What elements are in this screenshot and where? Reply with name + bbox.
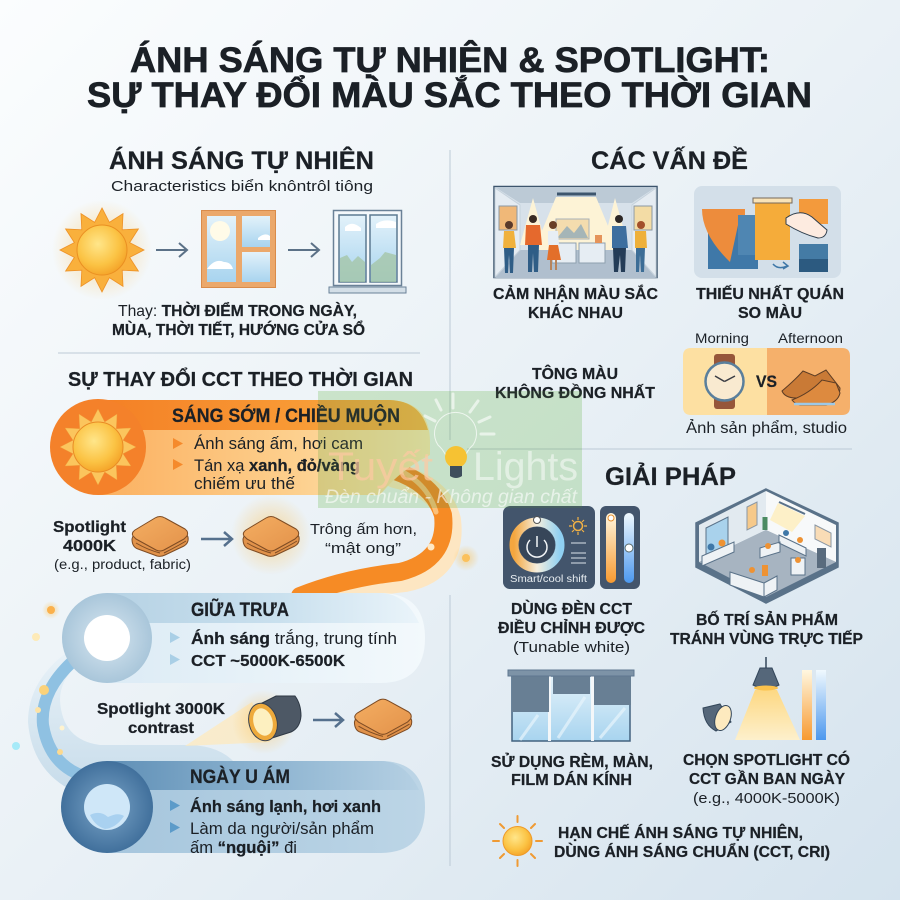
label: spotlight 3000K — [97, 701, 225, 737]
caption: tunable CCT: DÙNG ĐÈN CCT — [511, 599, 632, 618]
blue swirl connector — [12, 545, 479, 792]
text: variables: Thay: THỜI ĐIỂM TRONG NGÀY, — [118, 301, 357, 320]
band background — [98, 400, 430, 495]
watermark logo: Lights — [473, 445, 578, 489]
label: spotlight 4000K — [53, 519, 191, 572]
panel: watch vs shoes — [683, 348, 850, 415]
text: morning details: chiếm ưu thế — [194, 475, 295, 493]
icon: modern window — [329, 210, 406, 293]
title — [87, 40, 812, 115]
watermark logo: Đèn chuẩn - Không gian chất — [325, 487, 578, 508]
heading: midday: GIỮA TRƯA — [191, 599, 289, 621]
caption: product photos: Ảnh sản phẩm, studio — [686, 418, 847, 437]
panel: early morning / late afternoon — [50, 399, 430, 495]
panel: overcast — [61, 761, 425, 857]
caption: color perception — [493, 284, 658, 322]
watermark logo — [318, 391, 582, 508]
heading: CCT over time: SỰ THAY ĐỔI CCT THEO THỜI GIAN — [68, 367, 413, 391]
text: midday details: Ánh sáng trắng, trung tính — [191, 629, 397, 648]
heading: natural light: ÁNH SÁNG TỰ NHIÊN — [109, 145, 374, 175]
caption: blinds: FILM DÁN KÍNH — [511, 770, 632, 789]
text: variables: MÙA, THỜI TIẾT, HƯỚNG CỬA SỔ — [112, 320, 365, 339]
icon: fabric before — [132, 516, 188, 556]
text: warmer: “mật ong” — [325, 540, 401, 557]
icon: fabric warm — [231, 495, 311, 575]
caption: product placement: BỐ TRÍ SẢN PHẨM — [696, 609, 838, 629]
heading: problems: CÁC VẤN ĐỀ — [591, 146, 748, 175]
text: overcast details: ấm “nguội” đi — [190, 839, 297, 857]
bullets — [170, 632, 180, 665]
text: VS: VS — [756, 373, 777, 391]
panel: solutions — [491, 461, 863, 866]
heading: solutions: GIẢI PHÁP — [605, 461, 736, 491]
panel: problems — [493, 146, 850, 437]
orange ribbon arrow — [300, 466, 450, 600]
labels: morning afternoon: Morning — [695, 330, 749, 346]
spotlight 4000K row — [53, 495, 417, 575]
bullets — [173, 438, 183, 470]
caption: uneven tone — [495, 364, 655, 402]
icon: CCT sliders — [600, 506, 640, 589]
title: SỰ THAY ĐỔI MÀU SẮC THEO THỜI GIAN — [87, 75, 812, 115]
title: ÁNH SÁNG TỰ NHIÊN & SPOTLIGHT: — [130, 40, 770, 80]
icon: bulb — [425, 394, 494, 478]
band background — [107, 761, 425, 853]
caption: choose spotlight: (e.g., 4000K-5000K) — [693, 791, 840, 807]
label: spotlight 4000K: (e.g., product, fabric) — [54, 557, 191, 572]
caption: inconsistency: SO MÀU — [738, 303, 802, 322]
label: spotlight 4000K: Spotlight — [53, 519, 127, 536]
icon: sun — [52, 200, 152, 300]
caption: choose spotlight: CHỌN SPOTLIGHT CÓ — [683, 750, 850, 769]
icon: tunable control dial — [503, 506, 595, 589]
icon: watch — [706, 354, 744, 409]
text: variables — [112, 301, 365, 339]
illustration: fabric comparison — [694, 186, 841, 278]
caption: product placement: TRÁNH VÙNG TRỰC TIẾP — [670, 629, 863, 648]
bullets — [170, 800, 180, 833]
caption: tunable CCT: ĐIỀU CHỈNH ĐƯỢC — [498, 618, 645, 637]
label: spotlight 4000K: 4000K — [63, 538, 116, 555]
label: spotlight 3000K: contrast — [128, 720, 195, 737]
icon: morning sun — [50, 399, 146, 495]
callout: limit natural light: HẠN CHẾ ÁNH SÁNG TỰ NHIÊN, — [558, 823, 803, 842]
text: morning details: Ánh sáng ấm, hơi cam — [194, 434, 363, 453]
text: warmer: Trông ấm hơn, — [310, 521, 417, 538]
band background — [107, 593, 425, 683]
text: midday details: CCT ~5000K-6500K — [191, 653, 345, 670]
callout: limit natural light — [554, 823, 830, 861]
caption: blinds — [491, 752, 653, 789]
icon: small sun — [493, 816, 542, 866]
illustration: gallery visitors — [494, 186, 657, 278]
heading: morning: SÁNG SỚM / CHIỀU MUỘN — [172, 405, 400, 427]
text: morning details — [194, 434, 363, 493]
icon: white sun — [62, 593, 152, 683]
icon: overcast sun — [61, 761, 153, 853]
illustration: daylight spotlight — [703, 657, 826, 740]
labels: morning afternoon — [695, 330, 843, 346]
text: overcast details: Làm da người/sản phẩm — [190, 820, 374, 838]
caption: choose spotlight — [683, 750, 850, 807]
caption: blinds: SỬ DỤNG RÈM, MÀN, — [491, 752, 653, 771]
heading: overcast: NGÀY U ÁM — [190, 766, 290, 788]
labels: morning afternoon: Afternoon — [778, 330, 843, 346]
illustration: window blinds — [508, 670, 634, 741]
light beam — [185, 702, 270, 746]
icon: shoes — [782, 370, 840, 405]
arrow — [201, 532, 232, 546]
caption: color perception: KHÁC NHAU — [528, 303, 623, 322]
icon: tunable control dial: Smart/cool shift — [510, 574, 587, 585]
watermark text: Tuyết — [328, 445, 433, 489]
caption: product placement — [670, 609, 863, 648]
caption: color perception: CẢM NHẬN MÀU SẮC — [493, 284, 658, 303]
subtitle: Characteristics biển knôntrôl tiông — [111, 178, 373, 195]
arrow — [156, 243, 187, 257]
caption: tunable CCT — [498, 599, 645, 656]
caption: tunable CCT: (Tunable white) — [513, 639, 630, 656]
panel: midday — [62, 593, 425, 683]
callout: limit natural light: DÙNG ÁNH SÁNG CHUẨN (CCT, CRI) — [554, 842, 830, 861]
text: overcast details — [190, 797, 381, 857]
caption: inconsistency — [696, 284, 844, 322]
illustration: isometric room — [696, 489, 838, 603]
arrow — [288, 243, 319, 257]
icon: fabric — [354, 699, 412, 740]
spotlight 3000K row — [97, 690, 412, 754]
icon: wooden window — [202, 210, 276, 288]
caption: uneven tone: KHÔNG ĐỒNG NHẤT — [495, 383, 655, 402]
text: midday details — [191, 629, 397, 670]
label: spotlight 3000K: Spotlight 3000K — [97, 701, 225, 718]
text: overcast details: Ánh sáng lạnh, hơi xanh — [190, 797, 381, 816]
caption: inconsistency: THIẾU NHẤT QUÁN — [696, 284, 844, 303]
text: morning details: Tán xạ xanh, đỏ/vàng — [194, 457, 360, 475]
text: warmer — [310, 521, 417, 557]
icon: spotlight lamp — [232, 690, 301, 754]
caption: uneven tone: TÔNG MÀU — [532, 364, 618, 383]
caption: choose spotlight: CCT GẦN BAN NGÀY — [689, 769, 845, 788]
arrow — [313, 713, 343, 727]
panel: natural light — [52, 145, 406, 339]
